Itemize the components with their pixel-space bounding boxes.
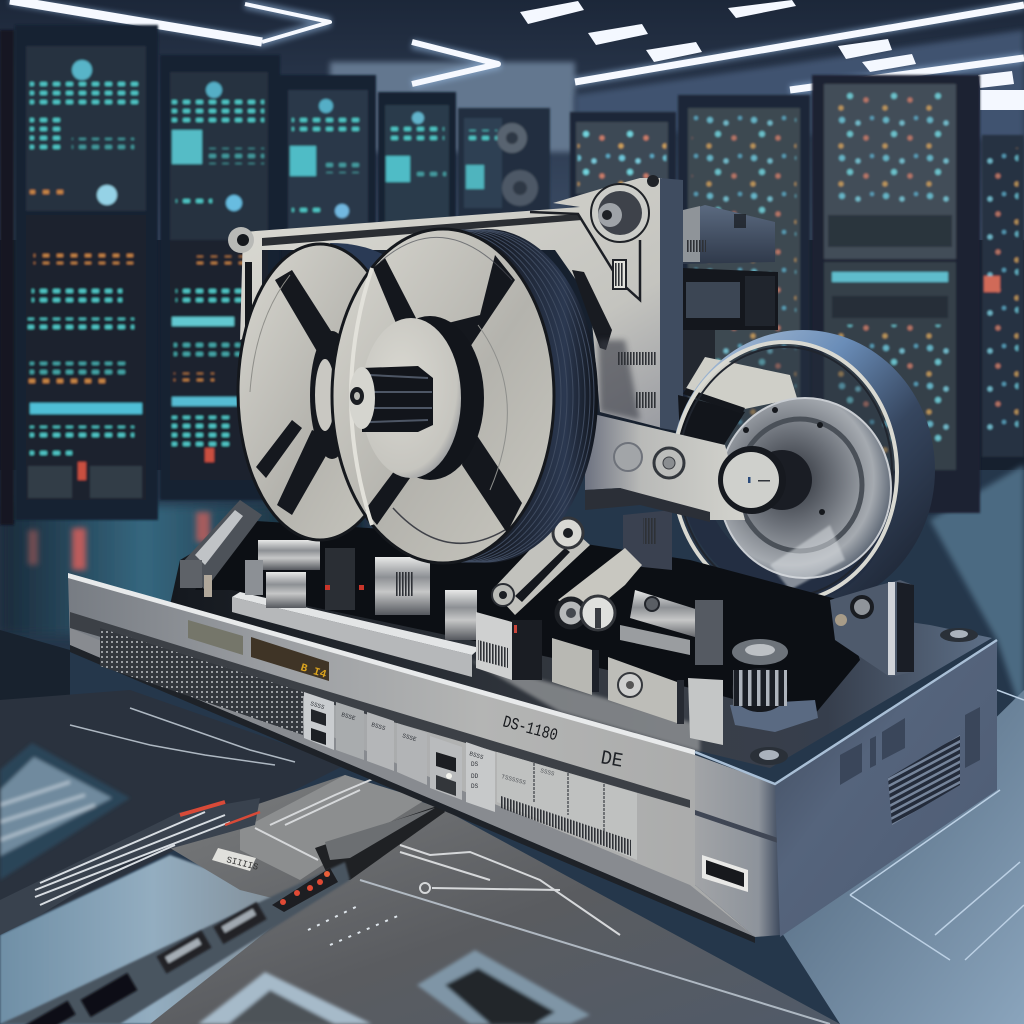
front button modules: DS bbox=[471, 761, 479, 768]
base top surface bbox=[170, 525, 992, 768]
machinery shadow bbox=[195, 520, 860, 720]
right glass reel bbox=[671, 330, 935, 610]
base right face bbox=[775, 640, 997, 937]
front button modules: SSSE bbox=[401, 732, 418, 743]
floor label bbox=[212, 848, 259, 873]
side vent bbox=[888, 735, 960, 825]
lever arm one bbox=[492, 518, 590, 615]
server rack right 2 bbox=[678, 95, 810, 515]
rear reel spokes bbox=[256, 270, 340, 515]
server rack right 4 bbox=[982, 135, 1024, 457]
floor label: SIIIIS bbox=[225, 855, 259, 873]
server rack left 1 bbox=[0, 25, 158, 525]
server rack left 5 with gears bbox=[458, 108, 550, 226]
floor chip left bbox=[0, 743, 130, 880]
server rack right 1 bbox=[570, 112, 676, 207]
rear tape reel bbox=[238, 243, 402, 540]
server rack right 3 bbox=[812, 75, 980, 513]
lever arm two bbox=[558, 548, 723, 665]
frame knob left bbox=[228, 227, 254, 253]
cable bundle bbox=[0, 798, 260, 935]
reel tape rim bbox=[376, 229, 598, 563]
floor centre bbox=[150, 775, 840, 1024]
label sticker with barcode: TSSSSSS bbox=[500, 773, 527, 787]
base front face bbox=[68, 575, 755, 937]
device base bbox=[68, 525, 997, 943]
right bracket bbox=[830, 580, 914, 677]
corner panel bbox=[695, 755, 780, 937]
reel silver hub disc bbox=[719, 398, 891, 578]
reel lower glass bbox=[680, 480, 893, 600]
spindle bbox=[349, 366, 433, 432]
ventilation grille bbox=[100, 628, 303, 735]
latch blocks bbox=[552, 638, 723, 745]
front button modules: DS bbox=[471, 783, 479, 790]
twin knobs bbox=[557, 596, 615, 630]
front button modules: SSSS bbox=[309, 700, 326, 711]
model number: DS-1180 bbox=[500, 713, 559, 746]
frame knob right bbox=[591, 184, 649, 242]
reel dark spokes bbox=[365, 255, 522, 533]
chrome block left bbox=[245, 540, 364, 610]
front tape reel bbox=[332, 229, 598, 563]
screws bbox=[750, 628, 978, 765]
ceiling lights bbox=[10, 0, 1024, 110]
floor lower left bbox=[0, 855, 340, 1024]
reel hub disc bbox=[361, 318, 461, 478]
floor circuit panel pattern bbox=[0, 690, 1024, 1024]
frame label patch bbox=[613, 260, 626, 289]
model suffix: DE bbox=[599, 747, 624, 774]
barcode block bbox=[476, 612, 542, 680]
front button modules: BSSE bbox=[340, 711, 357, 722]
server racks background bbox=[0, 25, 1024, 525]
ceiling and back wall bbox=[0, 0, 1024, 240]
reel blue ring bbox=[671, 330, 935, 610]
chrome block centre bbox=[375, 557, 477, 640]
back block bbox=[623, 510, 672, 570]
USB port bbox=[702, 855, 748, 892]
pivot arm bbox=[585, 412, 812, 522]
gear knob bbox=[730, 639, 818, 732]
front button modules: DD bbox=[471, 773, 479, 780]
upper drive module bbox=[683, 205, 778, 390]
reel ribbons bbox=[351, 268, 372, 525]
floor chip bottom left bbox=[198, 972, 372, 1024]
reel glass interior bbox=[673, 342, 897, 602]
small display slot bbox=[188, 620, 243, 655]
tape frame bracket bbox=[228, 175, 683, 432]
left support arm bbox=[180, 500, 262, 597]
reel face bbox=[332, 229, 554, 563]
front button modules bbox=[304, 692, 495, 812]
floor reflections bbox=[28, 512, 210, 570]
side slots bbox=[840, 707, 980, 785]
label sticker with barcode: SSSS bbox=[539, 767, 556, 778]
mechanical parts on the base bbox=[180, 500, 914, 745]
floor chip bottom centre bbox=[417, 950, 590, 1024]
front button modules: BSSS bbox=[468, 750, 485, 761]
floor connector strip bbox=[0, 805, 445, 1024]
server rack left 4 bbox=[378, 92, 456, 232]
amber display: B I4 bbox=[299, 662, 328, 682]
reel dark hub backing bbox=[376, 316, 484, 480]
reel dark gap and spoke bbox=[678, 357, 797, 455]
label sticker with barcode bbox=[497, 752, 637, 860]
floor bbox=[0, 465, 1024, 1024]
front button modules: BSSS bbox=[370, 721, 387, 732]
long steel rail bbox=[232, 597, 472, 677]
server rack left 2 bbox=[160, 55, 280, 500]
amber display bbox=[251, 637, 329, 682]
server rack left 3 bbox=[280, 75, 376, 245]
